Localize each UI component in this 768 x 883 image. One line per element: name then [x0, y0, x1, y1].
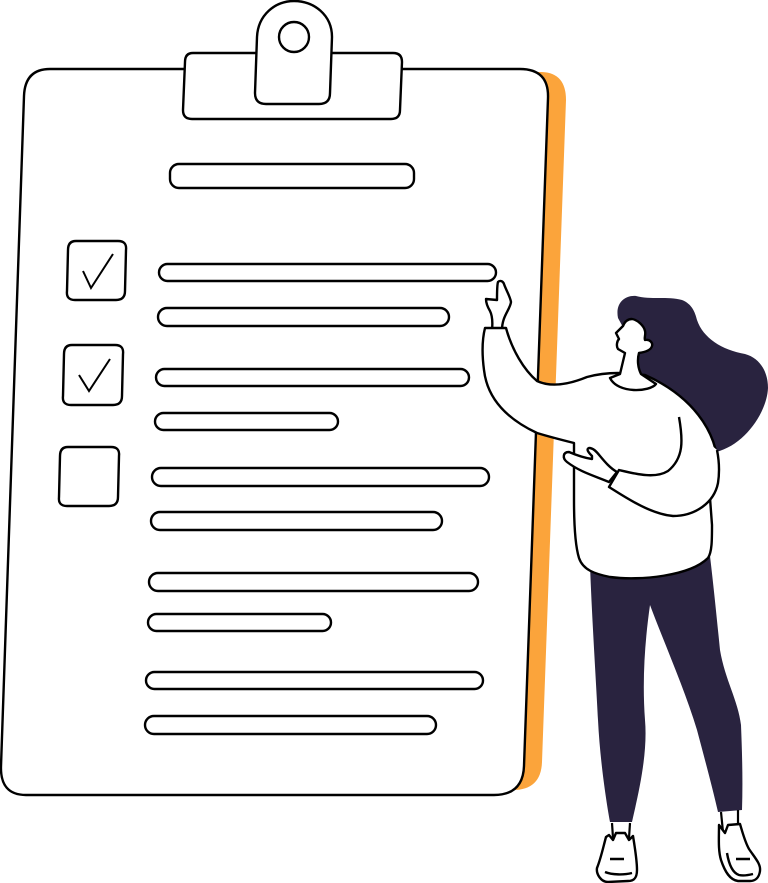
list lines row 1 [158, 264, 496, 326]
list lines row 2 [155, 369, 469, 430]
clipboard clip [183, 1, 402, 119]
left shoe [597, 833, 637, 882]
list lines row 4 [148, 573, 478, 631]
clipboard orange back edge [500, 72, 566, 790]
checked box 1 [67, 241, 126, 300]
clip hole [279, 22, 309, 52]
clip tab [255, 1, 332, 104]
checked box 2 [63, 345, 123, 405]
clipboard board [1, 69, 548, 795]
right shoe [719, 824, 760, 881]
checklist title bar [170, 164, 414, 188]
ankles [612, 810, 738, 838]
folded forearm [609, 417, 719, 516]
woman figure [483, 281, 768, 882]
sweater with raised arm [483, 328, 718, 578]
unchecked box [59, 447, 119, 506]
lower hand [564, 448, 617, 482]
list lines row 5 [145, 672, 483, 734]
legs [590, 556, 742, 822]
raised hand [486, 281, 511, 330]
hair [617, 296, 768, 452]
list lines row 3 [151, 468, 489, 530]
neck and head [610, 319, 656, 390]
clip base [183, 53, 402, 119]
